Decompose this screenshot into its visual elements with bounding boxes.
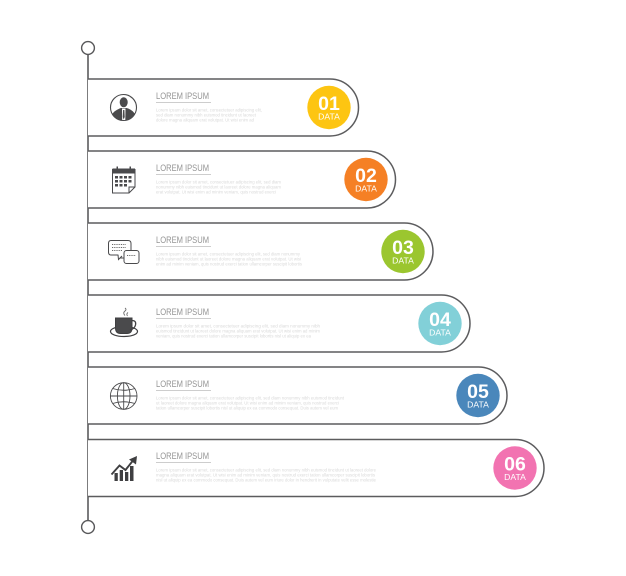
panel: step 03 [88, 223, 433, 280]
text block [156, 180, 281, 194]
number badge 04 [418, 302, 462, 345]
number badge 01: 01 [318, 93, 340, 115]
text block: sed diam nonummy nibh euismod tincidunt ut laoreet [156, 112, 257, 118]
heading: LOREM IPSUM [156, 379, 209, 389]
icon: globe [110, 383, 137, 409]
number badge 02: 02 [355, 165, 377, 187]
icon: calendar [112, 166, 135, 193]
number badge 06: 06 [504, 454, 526, 476]
text block [156, 324, 320, 338]
text block: Lorem ipsum dolor sit amet, consectetuer adipiscing elit, sed diam nonummy [156, 252, 301, 256]
text block: dolore magna aliquam erat volutpat. Ut wisi enim ad [156, 118, 254, 122]
text block: erat volutpat. Ut wisi enim ad minim veniam, quis nostrud exerci [156, 190, 276, 194]
timeline axis [82, 42, 94, 533]
text block: Lorem ipsum dolor sit amet, consectetuer adipiscing elit, sed diam nonummy nibh [156, 324, 320, 328]
text block: nonummy nibh euismod tincidunt ut laoreet dolore magna aliquam [156, 184, 281, 190]
text block [156, 108, 262, 122]
number badge 04: 04 [429, 309, 451, 331]
text block: euismod tincidunt ut laoreet dolore magna aliquam erat volutpat. Ut wisi enim ad minim [156, 328, 320, 334]
number badge 01: DATA [318, 112, 340, 122]
text block: veniam, quis nostrud exerci tation ullamcorper suscipit lobortis nisl ut aliquip ex ea [156, 334, 311, 338]
number badge 01 [307, 86, 351, 129]
heading: LOREM IPSUM [156, 307, 209, 317]
text block: ut laoreet dolore magna aliquam erat volutpat. Ut wisi enim ad minim veniam, quis nostrud exerci [156, 400, 339, 406]
heading: LOREM IPSUM [156, 163, 209, 173]
heading: LOREM IPSUM [156, 235, 209, 245]
number badge 02 [344, 158, 388, 201]
number badge 02: DATA [355, 184, 377, 194]
heading: LOREM IPSUM [156, 91, 209, 101]
number badge 05: DATA [467, 400, 489, 410]
text block: nisl ut aliquip ex ea commodo consequat. Duis autem vel eum iriure dolor in hendrerit in vulputate velit esse molestie [156, 478, 376, 482]
panel: step 02 [88, 151, 396, 208]
heading: LOREM IPSUM [156, 451, 209, 461]
number badge 03: DATA [392, 256, 414, 266]
number badge 06 [493, 446, 537, 490]
number badge 03: 03 [392, 237, 414, 259]
text block: Lorem ipsum dolor sit amet, consectetuer adipiscing elit, sed diam nonummy nibh euismod tincidunt ut laoreet dolore [156, 468, 376, 472]
number badge 05: 05 [467, 381, 489, 403]
icon: coffee cup [110, 308, 138, 336]
text block: enim ad minim veniam, quis nostrud exerci tation ullamcorper suscipit lobortis [156, 262, 303, 266]
text block: nibh euismod tincidunt ut laoreet dolore magna aliquam erat volutpat. Ut wisi [156, 256, 301, 262]
text block: Lorem ipsum dolor sit amet, consectetuer adipiscing elit, [156, 108, 262, 112]
icon: businessman [110, 94, 136, 120]
panel: step 04 [88, 295, 470, 352]
text block: tation ullamcorper suscipit lobortis nisl ut aliquip ex ea commodo consequat. Duis autem vel eum [156, 406, 338, 410]
text block: Lorem ipsum dolor sit amet, consectetuer adipiscing elit, sed diam nonummy nibh euismod tincidunt [156, 396, 345, 400]
number badge 06: DATA [504, 472, 526, 482]
text block [156, 396, 345, 410]
text block [156, 252, 303, 266]
text block: Lorem ipsum dolor sit amet, consectetuer adipiscing elit, sed diam [156, 180, 281, 184]
icon: growth chart [112, 456, 137, 481]
text block: magna aliquam erat volutpat. Ut wisi enim ad minim veniam, quis nostrud exerci tation ullamcorper suscipit lobortis [156, 472, 376, 478]
panel: step 05 [88, 367, 507, 424]
number badge 04: DATA [429, 328, 451, 338]
panel: step 06 [88, 440, 544, 496]
text block [156, 468, 376, 482]
number badge 05 [456, 374, 500, 417]
icon: speech bubbles [108, 240, 139, 264]
panel: step 01 [88, 79, 358, 136]
number badge 03 [381, 230, 425, 273]
